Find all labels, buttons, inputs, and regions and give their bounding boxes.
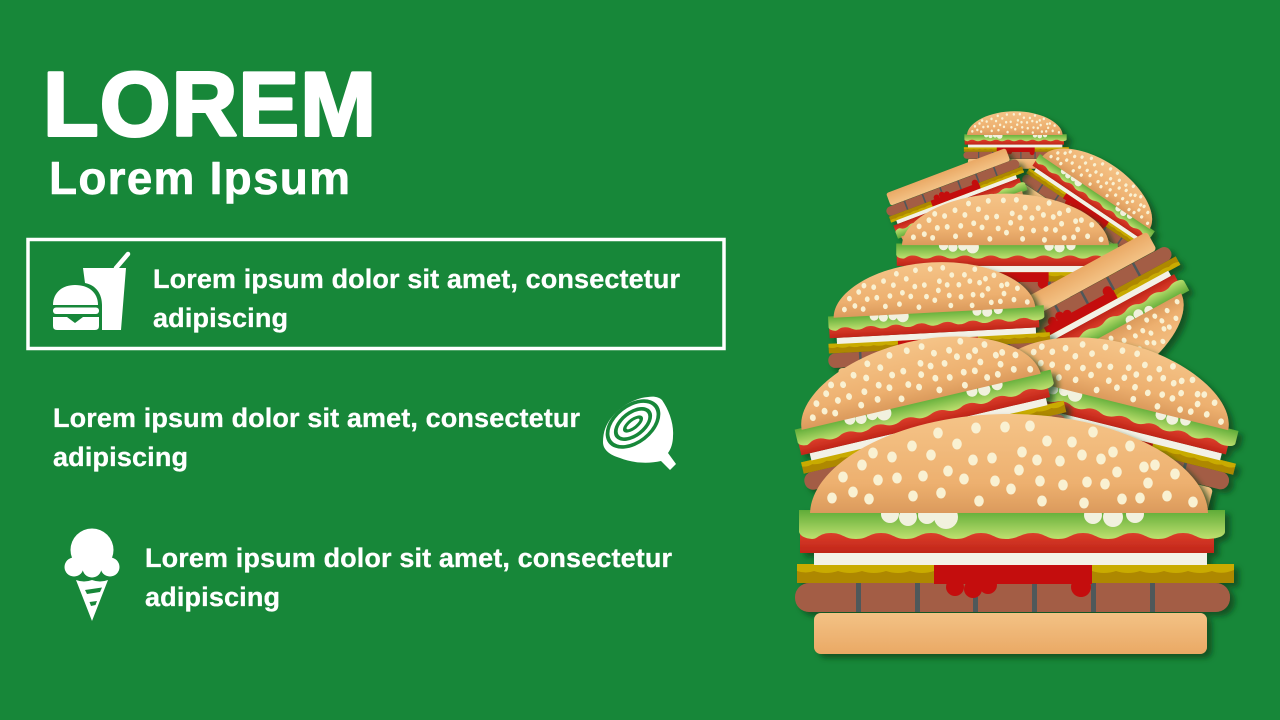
text: third item: adipiscing [145,582,280,612]
text: second item: adipiscing [53,442,188,472]
text: first item: adipiscing [153,303,288,333]
icon: burger and drink [53,254,128,330]
text: first item: Lorem ipsum dolor sit amet, consectetur [153,264,680,294]
burger: large front [795,414,1234,654]
text: third item [145,543,672,612]
burger pile illustration [779,111,1258,654]
text: third item: Lorem ipsum dolor sit amet, consectetur [145,543,672,573]
icon: ice cream cone [64,528,120,621]
burger: top small [963,111,1069,169]
burger: lower left tilted [779,311,1076,517]
burger: middle left [823,256,1052,390]
burger: upper left flipped [880,145,1041,268]
burger: lower right tilted [967,313,1258,516]
text: first item [153,264,680,333]
highlighted box [28,240,724,348]
subtitle: Lorem Ipsum [49,152,350,204]
burger: right flipped [966,225,1216,436]
burger: upper middle [894,194,1122,318]
text: second item [53,403,580,472]
burger: upper right tilted [1013,127,1175,272]
icon: onion [596,389,676,470]
text: second item: Lorem ipsum dolor sit amet, consectetur [53,403,580,433]
title: LOREM [43,54,376,156]
